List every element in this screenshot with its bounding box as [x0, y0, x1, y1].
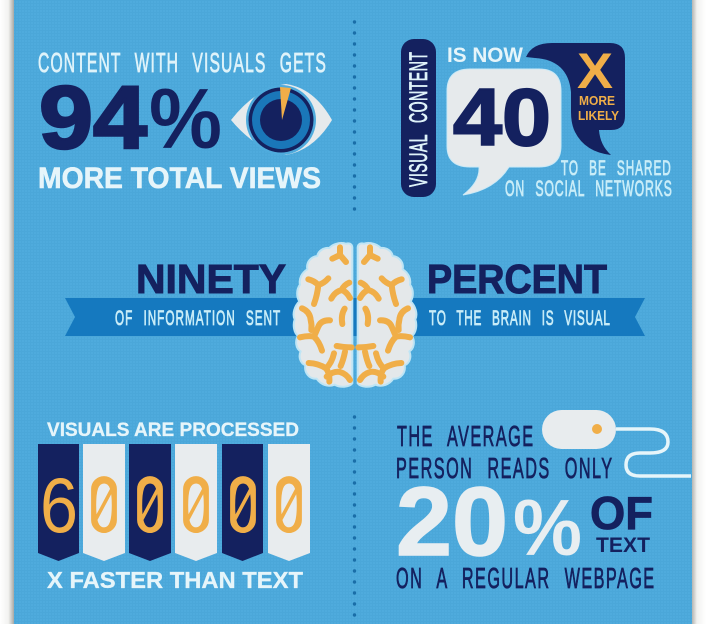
text: person reads only: PERSON READS ONLY — [396, 452, 612, 484]
icon: eye — [231, 84, 332, 155]
stat: percent sign: % — [513, 483, 582, 572]
text: X: X — [577, 43, 613, 99]
stat: 20: 20 — [396, 467, 508, 576]
panel: 40x more likely to be shared — [401, 39, 672, 201]
digits: 600000 — [40, 461, 304, 549]
text: more: MORE — [579, 93, 615, 108]
digits: 600000: 0 — [274, 461, 304, 549]
digits: 600000: 0 — [136, 461, 164, 549]
digits: 600000: 0 — [182, 461, 210, 549]
digits: 600000: 0 — [228, 461, 258, 549]
speech bubble: white — [447, 69, 561, 195]
text: more total views: MORE TOTAL VIEWS — [38, 162, 321, 195]
pill: visual content — [401, 39, 436, 197]
stat: 94: 94 — [39, 67, 148, 167]
ribbon — [65, 298, 645, 336]
text: x faster than text: X FASTER THAN TEXT — [47, 567, 303, 593]
text: of information sent: OF INFORMATION SENT — [115, 306, 280, 330]
panel: ninety percent brain — [65, 243, 645, 387]
text: likely: LIKELY — [578, 108, 619, 123]
panel: reads only 20 percent — [396, 410, 691, 594]
panel: 94 percent more views — [38, 46, 332, 195]
heading: percent: PERCENT — [427, 256, 607, 302]
text: to be shared: TO BE SHARED — [561, 156, 671, 180]
text: text: TEXT — [596, 534, 650, 557]
digits: 600000: 0 — [90, 461, 118, 549]
digits: 600000: 6 — [40, 461, 78, 549]
icon: brain — [294, 243, 416, 387]
text: content with visuals gets: CONTENT WITH VISUALS GETS — [38, 46, 326, 78]
text: is now: IS NOW — [447, 44, 523, 67]
text: on social networks: ON SOCIAL NETWORKS — [505, 176, 672, 201]
stat: 40: 40 — [453, 73, 551, 163]
banners — [38, 444, 310, 561]
text: of: OF — [590, 487, 653, 539]
text: to the brain is visual: TO THE BRAIN IS VISUAL — [429, 306, 610, 330]
icon: mouse — [542, 410, 691, 476]
pill: visual content: VISUAL CONTENT — [406, 52, 433, 187]
dotted divider: top — [353, 22, 356, 210]
speech bubble: navy — [526, 43, 625, 155]
text: on a regular webpage: ON A REGULAR WEBPAGE — [396, 562, 654, 594]
heading: ninety: NINETY — [136, 256, 286, 302]
panel: 600000 times faster — [38, 420, 310, 593]
text: visuals are processed: VISUALS ARE PROCESSED — [47, 420, 299, 441]
text: the average: THE AVERAGE — [397, 420, 533, 452]
stat: percent sign: % — [149, 72, 222, 167]
dotted divider: bottom — [353, 417, 356, 624]
